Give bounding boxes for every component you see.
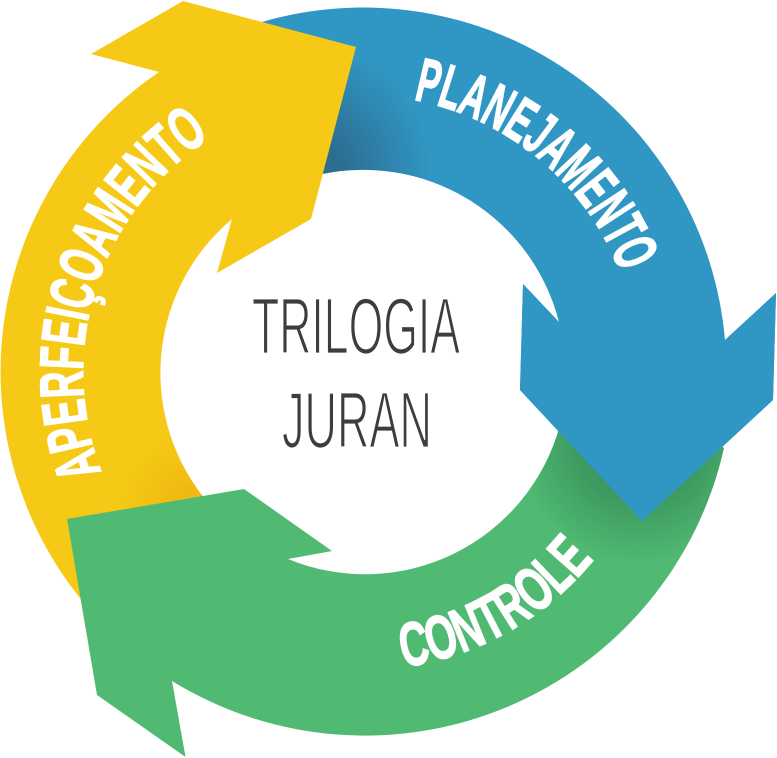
- title line 1: TRILOGIA: [252, 282, 460, 370]
- label: planejamento: PLANEJAMENTO: [415, 58, 657, 267]
- label: aperfeiçoamento: APERFEIÇOAMENTO: [40, 108, 204, 476]
- blue arrow head overlapping green: [520, 284, 776, 521]
- title: Trilogia Juran: [252, 282, 460, 464]
- title line 2: JURAN: [282, 376, 432, 464]
- label: controle: CONTROLE: [400, 532, 594, 666]
